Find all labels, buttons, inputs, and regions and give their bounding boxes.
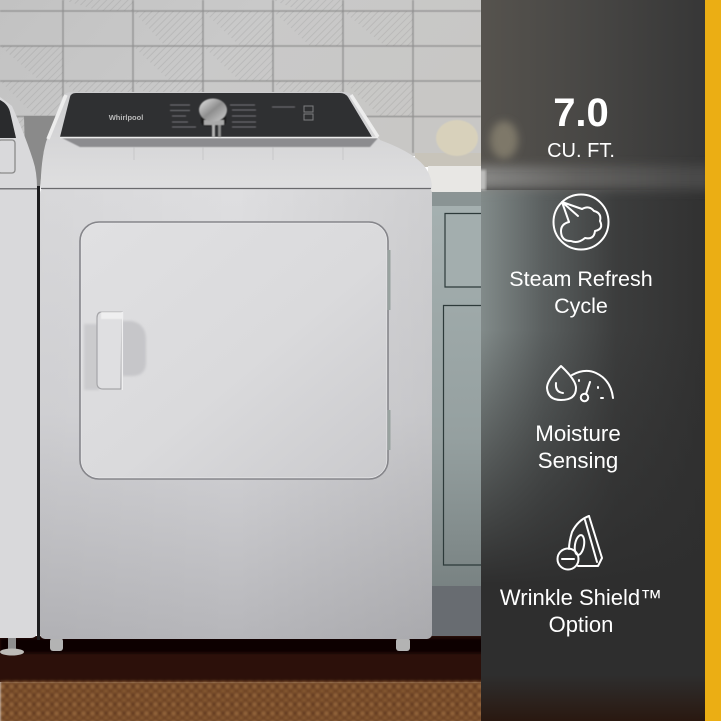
label: Wrinkle Shield™	[500, 585, 662, 610]
adjacent washer	[0, 97, 56, 656]
blurred counter	[460, 166, 720, 190]
feature: wrinkle shield: Option	[549, 612, 613, 637]
dial knob	[199, 98, 227, 137]
capacity stat: 7.0	[553, 91, 609, 135]
door outline	[80, 222, 388, 479]
icon: steam cloud	[554, 194, 608, 250]
blurred side panel	[481, 0, 705, 721]
blurred counter edge glow	[481, 168, 487, 192]
egg ornament on counter	[436, 120, 478, 156]
door handle	[84, 312, 146, 390]
dryer feet	[50, 638, 410, 651]
floor	[0, 636, 483, 682]
dryer lid	[40, 92, 432, 189]
control panel console	[60, 93, 372, 137]
icon: droplet and gauge	[547, 366, 613, 401]
label: Moisture	[535, 421, 621, 446]
icon: iron	[558, 516, 602, 570]
door hinges	[388, 250, 390, 310]
capacity stat: CU. FT.	[547, 140, 615, 162]
capacity stat	[547, 91, 615, 162]
feature: moisture sensing: Sensing	[538, 448, 618, 473]
control labels	[170, 105, 295, 127]
feature: steam refresh	[509, 194, 653, 318]
accent bar	[705, 0, 721, 721]
rug	[0, 681, 483, 721]
brand logo: Whirlpool	[109, 113, 143, 122]
tiled wall	[0, 0, 481, 156]
feature: steam refresh: Cycle	[554, 294, 608, 318]
feature: wrinkle shield	[500, 516, 662, 637]
label: Steam Refresh	[509, 267, 653, 291]
feature: moisture sensing	[535, 366, 621, 473]
lid reflections	[134, 147, 343, 160]
blurred egg	[490, 121, 518, 159]
counter	[415, 153, 483, 192]
cabinet	[430, 192, 483, 638]
shadow under dryer	[0, 638, 483, 653]
blurred floor	[481, 688, 705, 721]
dryer door	[82, 224, 386, 478]
dryer	[40, 92, 432, 651]
dryer cabinet front	[40, 188, 432, 639]
